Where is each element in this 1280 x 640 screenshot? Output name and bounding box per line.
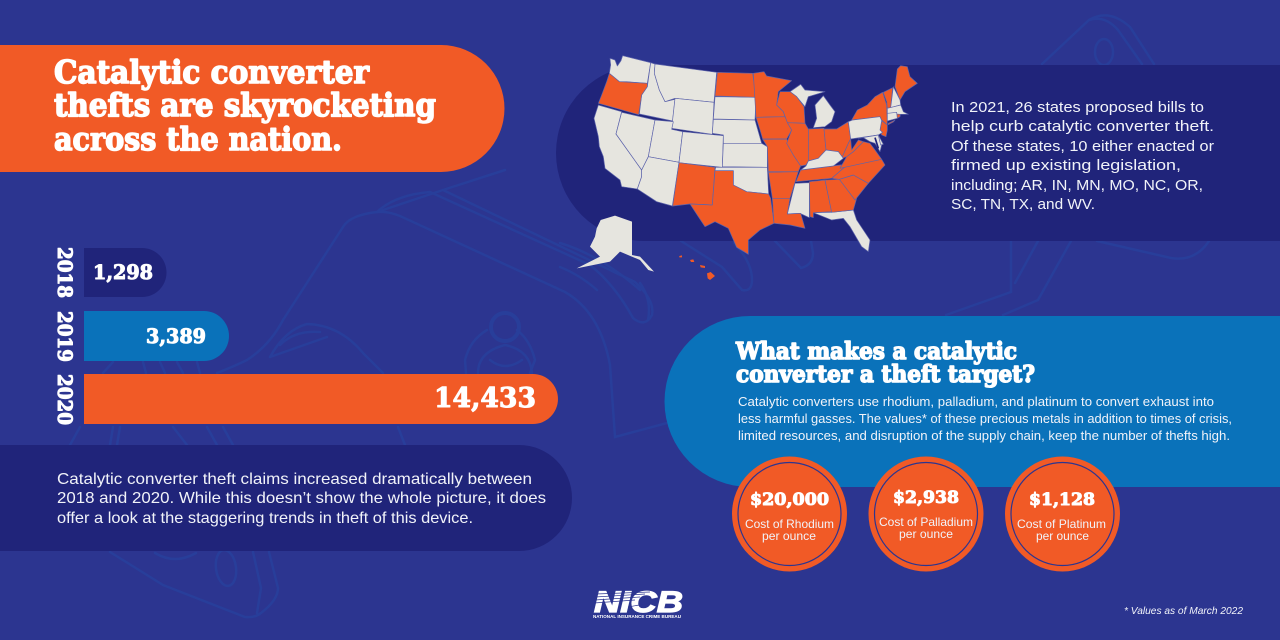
panel: state legislation [556,65,1280,241]
NICB logo: NICB [594,586,683,619]
price circle: platinum: Cost of Platinum [1017,517,1106,531]
legislation text: SC, TN, TX, and WV. [951,197,1095,213]
title text: thefts are skyrocketing [54,86,436,124]
legislation text [951,100,1214,213]
year labels: 2020 [53,374,77,425]
price circle: rhodium: per ounce [762,529,816,543]
title text: across the nation. [54,120,342,158]
legislation text: In 2021, 26 states proposed bills to [951,100,1204,116]
price circle: platinum [1005,456,1120,572]
claims text: Catalytic converter theft claims increased dramatically between [57,471,532,488]
price circle: rhodium: $20,000 [750,490,829,510]
theft target text: less harmful gasses. The values* of these precious metals in addition to times of crisis, [738,411,1232,426]
footnote: * Values as of March 2022 [1124,605,1243,617]
year labels [53,247,77,425]
theft target heading [735,338,1035,388]
price circle: palladium [868,456,984,572]
price circle: palladium: per ounce [899,527,953,541]
claims text: offer a look at the staggering trends in theft of this device. [57,510,473,527]
bar: 2018 [84,248,166,297]
price circle: platinum: $1,128 [1029,490,1095,510]
bar: 2019: 3,389 [146,324,206,348]
title text: Catalytic converter [54,53,370,91]
year labels: 2019 [53,311,77,362]
price circle: rhodium: Cost of Rhodium [745,517,834,531]
theft target text: limited resources, and disruption of the supply chain, keep the number of thefts high. [738,428,1230,443]
bar: 2020 [84,374,558,424]
legislation text: including; AR, IN, MN, MO, NC, OR, [951,178,1203,194]
panel: claims note [0,445,572,551]
bar: 2018: 1,298 [93,260,153,284]
bar: 2019 [84,311,229,361]
title panel [0,45,504,172]
NICB logo: NATIONAL INSURANCE CRIME BUREAU [593,614,682,619]
legislation text: firmed up existing legislation, [951,158,1181,174]
price circle: palladium: $2,938 [893,488,959,508]
panel: theft target [664,316,1280,487]
title text [54,53,436,158]
theft target heading: What makes a catalytic [735,338,1017,365]
bar: 2020: 14,433 [434,383,536,414]
theft target heading: converter a theft target? [736,361,1035,388]
theft target text [738,394,1232,443]
price circle: rhodium [732,456,847,572]
claims text [57,471,546,527]
legislation text: Of these states, 10 either enacted or [951,139,1214,155]
bar chart: thefts by year [53,247,558,425]
price circle: platinum: per ounce [1036,529,1089,543]
legislation text: help curb catalytic converter theft. [951,119,1214,135]
US map [577,56,917,280]
year labels: 2018 [53,247,77,298]
claims text: 2018 and 2020. While this doesn’t show the whole picture, it does [57,490,546,507]
price circle: palladium: Cost of Palladium [879,515,973,529]
theft target text: Catalytic converters use rhodium, palladium, and platinum to convert exhaust into [738,394,1214,409]
